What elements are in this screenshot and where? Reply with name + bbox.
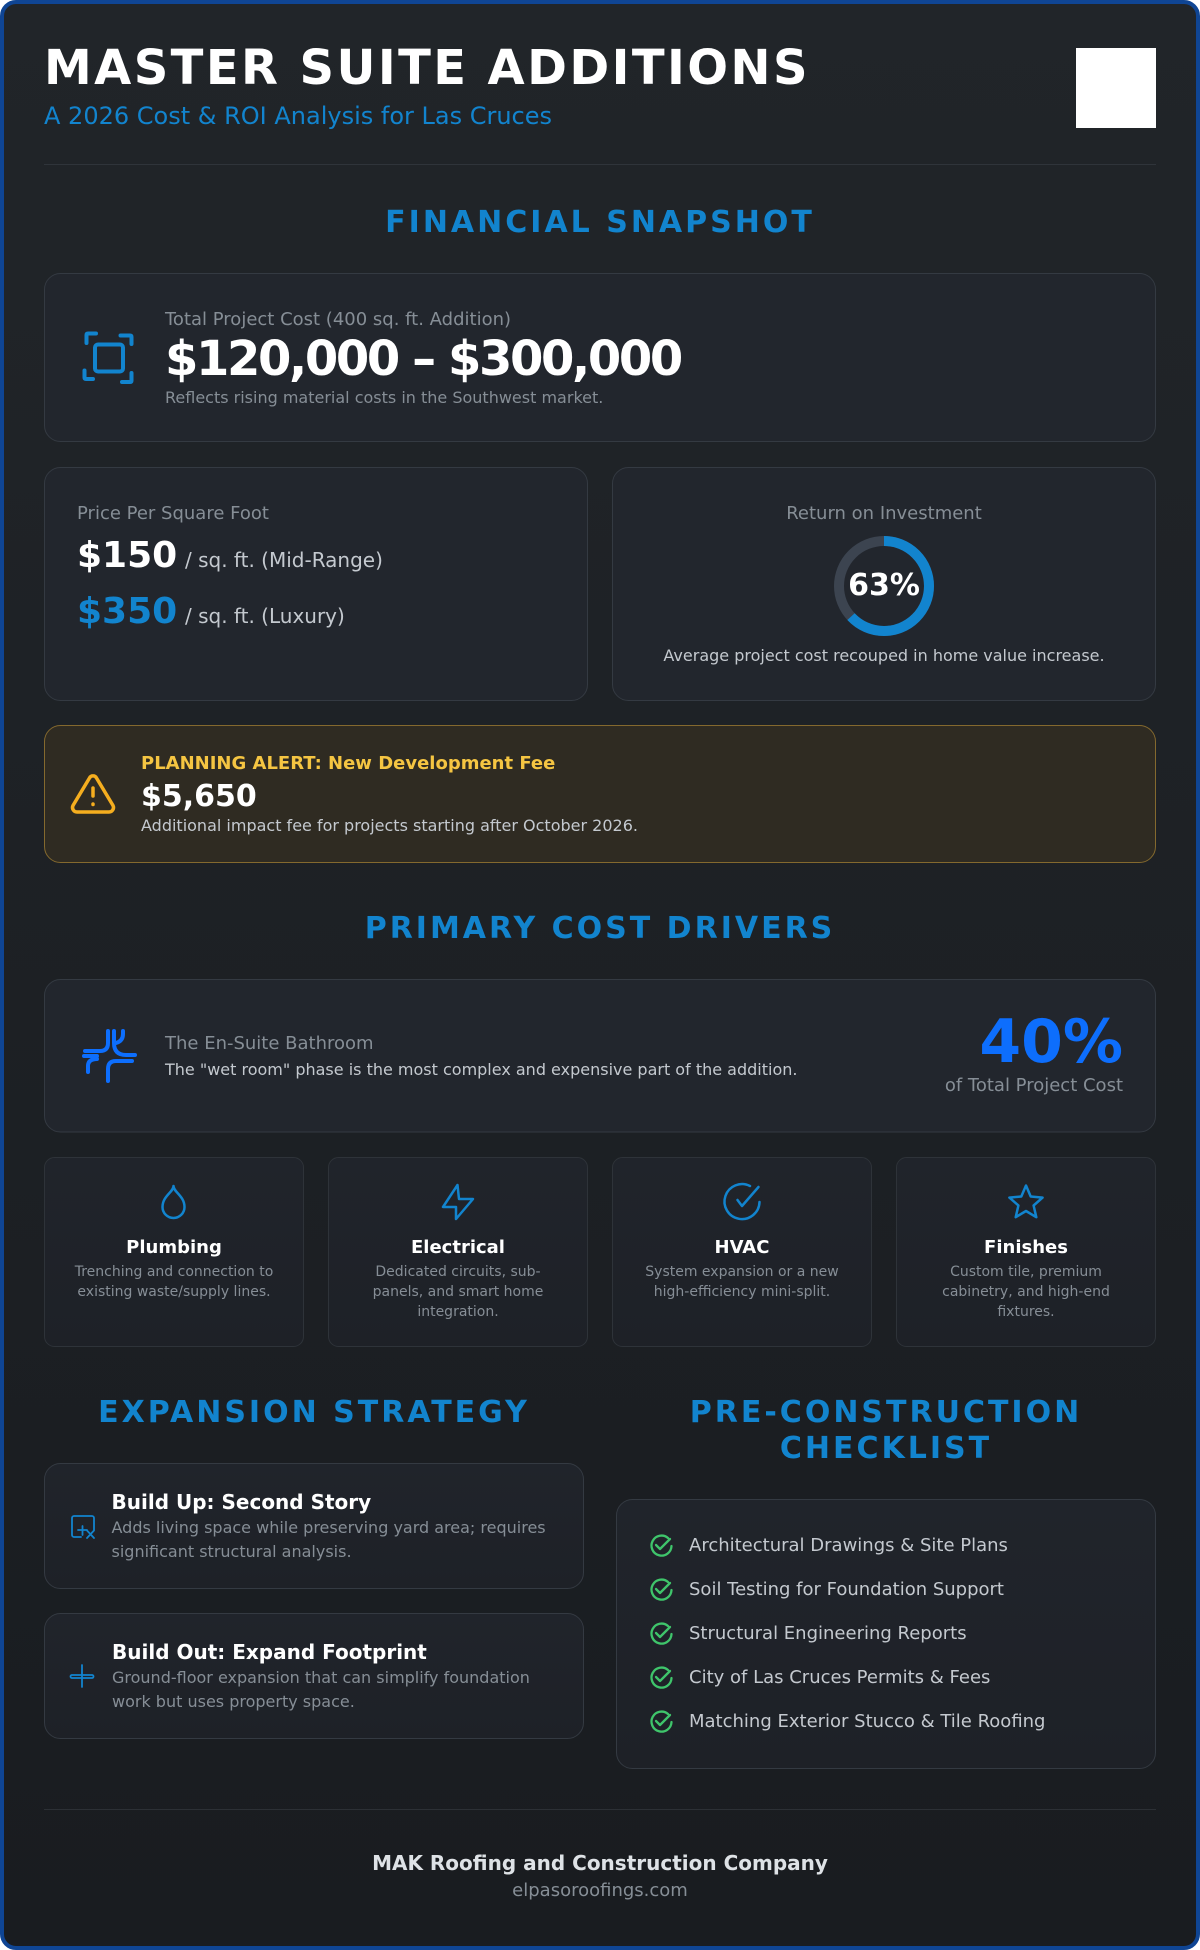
item: structural reports: Structural Engineering Reports <box>689 1623 967 1644</box>
icon: build up <box>72 1516 94 1538</box>
donut chart: 63%: 63% <box>848 568 920 603</box>
panel: en-suite bathroom: of Total Project Cost <box>945 1075 1123 1096</box>
icon: warning triangle <box>73 776 113 812</box>
callout: planning alert <box>44 726 1156 862</box>
panel: finishes <box>896 1158 1156 1346</box>
icon: scan frame <box>84 334 132 382</box>
icon: water drop <box>162 1186 184 1218</box>
heading: primary cost drivers: PRIMARY COST DRIVERS <box>365 911 835 946</box>
subtitle: A 2026 Cost & ROI Analysis for Las Cruces <box>44 102 552 130</box>
panel: plumbing <box>44 1158 304 1346</box>
item: soil testing: Soil Testing for Foundation Support <box>689 1579 1004 1600</box>
panel: electrical: integration. <box>417 1304 499 1320</box>
panel: total project cost <box>44 274 1156 442</box>
panel: finishes: Finishes <box>984 1237 1068 1258</box>
panel: hvac: high-efficiency mini-split. <box>654 1284 830 1300</box>
panel: build up: significant structural analysis. <box>112 1542 352 1561</box>
panel: electrical: Dedicated circuits, sub- <box>375 1264 541 1280</box>
footer: MAK Roofing and Construction Company <box>372 1851 828 1875</box>
heading: pre-construction checklist <box>690 1395 1082 1466</box>
panel: en-suite bathroom <box>44 980 1156 1132</box>
panel: build out: Ground-floor expansion that can simplify foundation <box>112 1668 530 1687</box>
note: Reflects rising material costs in the Southwest market. <box>165 388 603 407</box>
heading: pre-construction checklist: PRE-CONSTRUCTION <box>690 1395 1082 1430</box>
panel: hvac <box>612 1158 872 1346</box>
panel: electrical <box>328 1158 588 1346</box>
panel: finishes: Custom tile, premium <box>950 1264 1102 1280</box>
panel: build up <box>44 1464 584 1588</box>
icon: bathroom pipes <box>84 1031 135 1081</box>
panel: electrical: Electrical <box>411 1237 505 1258</box>
panel: return on investment: Average project cost recouped in home value increase. <box>663 646 1105 665</box>
item: drawings: Architectural Drawings & Site Plans <box>689 1535 1008 1556</box>
panel: finishes: cabinetry, and high-end <box>942 1284 1110 1300</box>
mid-range price: / sq. ft. (Mid-Range) <box>185 548 383 572</box>
panel: price per square foot <box>44 468 588 700</box>
icon: build out <box>70 1665 94 1687</box>
panel: build up: Build Up: Second Story <box>112 1490 371 1514</box>
logo placeholder <box>1076 48 1156 128</box>
panel: hvac: HVAC <box>715 1237 769 1258</box>
callout: planning alert: PLANNING ALERT: New Development Fee <box>141 753 555 774</box>
title: MASTER SUITE ADDITIONS <box>44 40 810 96</box>
panel: build out: work but uses property space. <box>112 1692 355 1711</box>
mid-range price: $150 <box>77 535 177 576</box>
panel: plumbing: Plumbing <box>126 1237 222 1258</box>
item: permits: City of Las Cruces Permits & Fees <box>689 1667 990 1688</box>
panel: return on investment <box>612 468 1156 700</box>
panel: en-suite bathroom: The "wet room" phase is the most complex and expensive part of the addition. <box>164 1060 797 1079</box>
heading: expansion strategy: EXPANSION STRATEGY <box>98 1395 530 1430</box>
footer <box>372 1851 828 1901</box>
luxury price: / sq. ft. (Luxury) <box>185 604 345 628</box>
icon: star <box>1009 1186 1043 1217</box>
luxury price: $350 <box>77 591 177 632</box>
icon: circle check <box>725 1184 760 1219</box>
panel: price per square foot: Price Per Square Foot <box>77 503 269 524</box>
callout: planning alert: Additional impact fee for projects starting after October 2026. <box>141 816 638 835</box>
panel: build out <box>44 1614 584 1738</box>
panel: plumbing: existing waste/supply lines. <box>77 1284 271 1300</box>
callout: planning alert: $5,650 <box>141 779 257 814</box>
heading: pre-construction checklist: CHECKLIST <box>780 1431 992 1466</box>
footer: elpasoroofings.com <box>512 1880 688 1901</box>
item: exterior matching: Matching Exterior Stucco & Tile Roofing <box>689 1711 1045 1732</box>
panel: finishes: fixtures. <box>997 1304 1055 1320</box>
stat: 40 percent: 40% <box>979 1007 1123 1077</box>
header <box>44 40 1156 130</box>
panel: build out: Build Out: Expand Footprint <box>112 1640 427 1664</box>
donut chart: 63% <box>839 541 929 631</box>
value: $120,000 – $300,000 <box>165 331 682 387</box>
heading: financial snapshot: FINANCIAL SNAPSHOT <box>385 205 815 240</box>
panel: electrical: panels, and smart home <box>373 1284 543 1300</box>
panel: plumbing: Trenching and connection to <box>74 1264 273 1280</box>
panel: hvac: System expansion or a new <box>645 1264 839 1280</box>
icon: lightning bolt <box>443 1185 473 1219</box>
panel: return on investment: Return on Investment <box>786 503 982 524</box>
panel: checklist <box>616 1500 1156 1768</box>
panel: build up: Adds living space while preserving yard area; requires <box>112 1518 546 1537</box>
panel: en-suite bathroom: The En-Suite Bathroom <box>164 1033 374 1054</box>
label: Total Project Cost (400 sq. ft. Addition) <box>164 309 511 330</box>
